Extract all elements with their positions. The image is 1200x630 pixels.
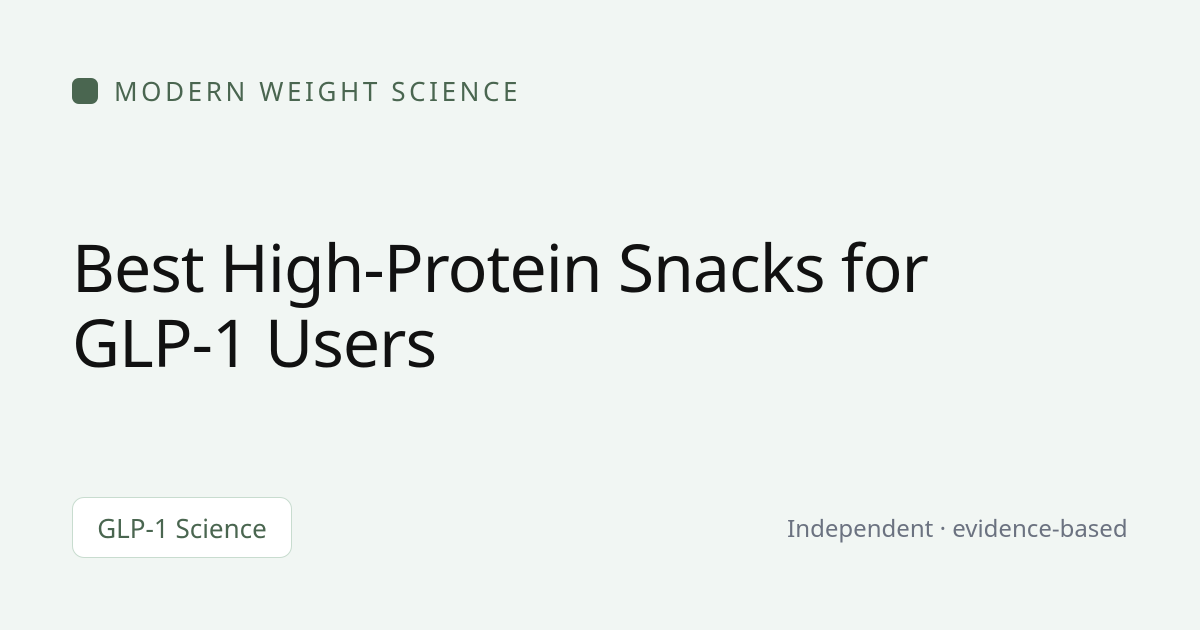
brand name: MODERN WEIGHT SCIENCE (114, 73, 521, 109)
tag pill (72, 497, 292, 558)
tag pill: GLP-1 Science (97, 510, 267, 546)
tagline: Independent · evidence-based (787, 512, 1128, 545)
icon: brand square (72, 78, 98, 104)
title (72, 222, 928, 387)
title: Best High-Protein Snacks for (72, 222, 928, 312)
brand row (72, 73, 521, 109)
title: GLP-1 Users (72, 297, 436, 387)
